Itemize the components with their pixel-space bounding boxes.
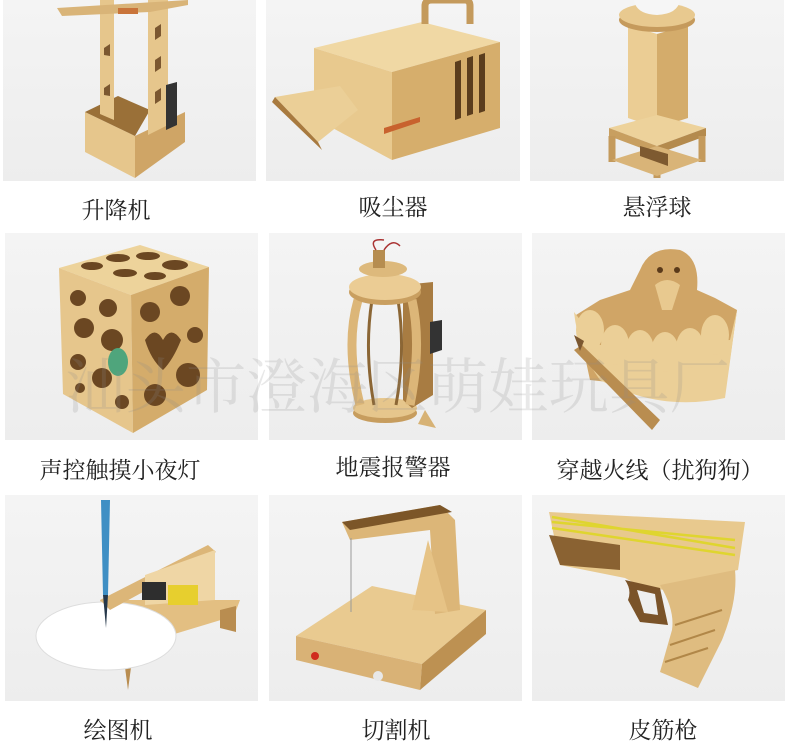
panel: cutting machine xyxy=(269,495,522,701)
label: 穿越火线（扰狗狗）: 穿越火线（扰狗狗） xyxy=(556,458,764,483)
panel: elevator xyxy=(3,0,256,181)
panel: levitating ball xyxy=(530,0,784,181)
watermark: 汕头市澄海区萌娃玩具厂 xyxy=(65,355,730,421)
panel: sound touch night light xyxy=(5,233,258,440)
label: 悬浮球: 悬浮球 xyxy=(622,195,692,220)
label: 地震报警器: 地震报警器 xyxy=(336,455,450,480)
panel: vacuum cleaner xyxy=(266,0,520,181)
panel: crossfire dog game xyxy=(532,233,785,440)
label: 绘图机: 绘图机 xyxy=(84,718,152,743)
label: 升降机: 升降机 xyxy=(82,198,150,223)
label: 切割机: 切割机 xyxy=(362,718,430,743)
label: 吸尘器: 吸尘器 xyxy=(358,195,428,220)
panel: drawing machine xyxy=(5,495,258,701)
label: 皮筋枪: 皮筋枪 xyxy=(628,718,698,743)
panel: earthquake alarm xyxy=(269,233,522,440)
label: 声控触摸小夜灯: 声控触摸小夜灯 xyxy=(40,458,200,483)
panel: rubber band gun xyxy=(532,495,785,701)
